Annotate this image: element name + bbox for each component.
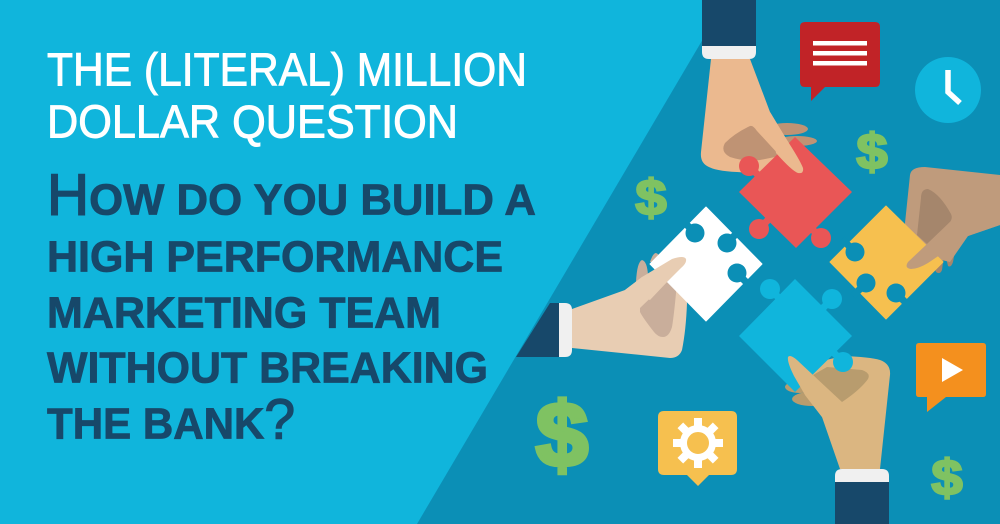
hand: left with white puzzle piece bbox=[516, 207, 762, 358]
puzzle piece: yellow bbox=[830, 206, 943, 319]
title: THE (LITERAL) MILLION bbox=[47, 44, 527, 96]
icon: orange video bubble bbox=[916, 343, 986, 412]
hand: right with yellow puzzle piece bbox=[830, 167, 1000, 319]
hand: bottom with blue puzzle piece bbox=[739, 279, 890, 524]
hand: top with red puzzle piece bbox=[701, 0, 852, 248]
panel: left light diagonal background bbox=[0, 0, 726, 524]
heading: question: THE BANK? bbox=[47, 388, 295, 452]
heading: question: WITHOUT BREAKING bbox=[47, 344, 488, 392]
title: DOLLAR QUESTION bbox=[47, 96, 458, 148]
puzzle piece: blue bbox=[739, 279, 853, 392]
heading: question: HIGH PERFORMANCE bbox=[47, 234, 503, 282]
icon: gear bubble bbox=[658, 411, 737, 486]
icon: dollar sign large: $ bbox=[536, 385, 588, 486]
icon: clock bbox=[915, 57, 981, 123]
puzzle piece: red bbox=[739, 137, 852, 248]
icon: dollar sign upper right: $ bbox=[856, 124, 888, 180]
icon: dollar sign bottom right: $ bbox=[932, 450, 963, 506]
heading: question: HOW DO YOU BUILD A bbox=[47, 162, 536, 228]
title bbox=[47, 44, 527, 148]
puzzle piece: white bbox=[650, 207, 762, 321]
heading: question bbox=[47, 162, 536, 452]
icon: dollar sign center: $ bbox=[636, 170, 667, 226]
heading: question: MARKETING TEAM bbox=[47, 290, 441, 338]
icon: red speech bubble bbox=[800, 22, 880, 101]
